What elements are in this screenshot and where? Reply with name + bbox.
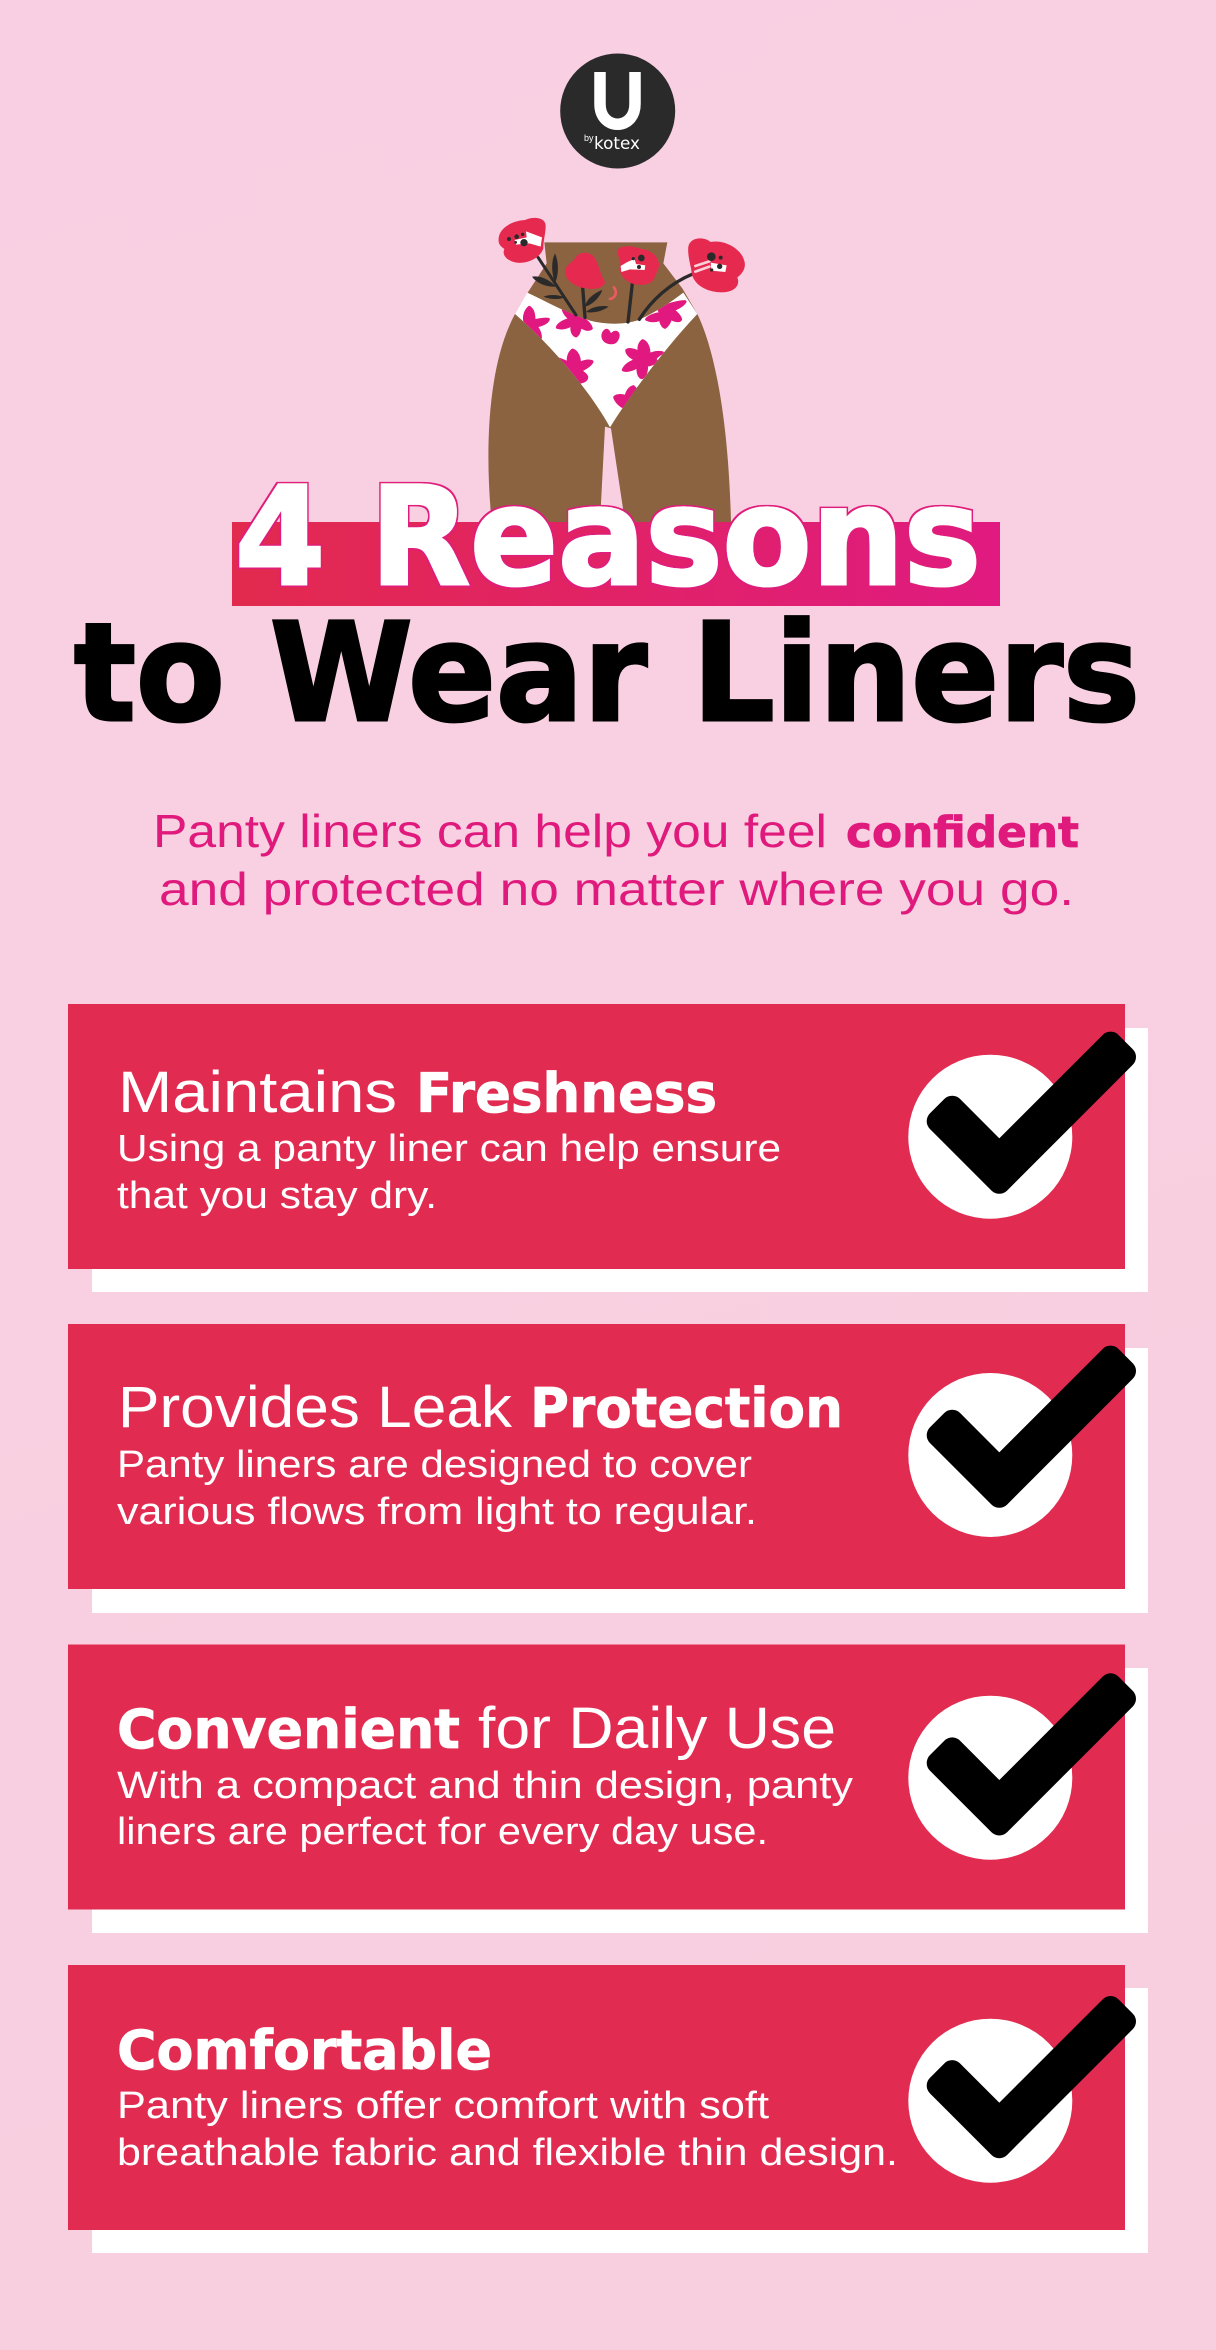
poppy: centre right [618,246,659,285]
icon: check mark [938,2007,1125,2147]
subtitle: Panty liners can help you feel [153,805,827,857]
stems and leaves [538,257,693,322]
illustration: body with floral underwear and poppies [488,218,745,522]
panel: Convenient for Daily Use: liners are perfect for every day use. [117,1811,768,1853]
poppy: far left [499,218,546,263]
title line 2: to Wear Liners: to Wear Liners [74,595,1140,753]
panel: Convenient for Daily Use [68,1644,1148,1933]
logo: U by kotex [560,54,675,168]
panel: Convenient for Daily Use: Convenient [117,1698,460,1761]
title highlight bar [232,522,1000,606]
icon: check mark [938,1043,1125,1183]
panel: Provides Leak Protection [68,1324,1148,1613]
panel: Comfortable: Panty liners offer comfort with soft [117,2085,769,2127]
panel: Comfortable: Comfortable [117,2019,492,2082]
panel: Maintains Freshness: Using a panty liner can help ensure [117,1128,781,1170]
poppy: far right [688,238,745,292]
title line 1: 4 Reasons: 4 Reasons [235,459,981,617]
icon: check mark [938,1684,1125,1824]
body [488,242,731,522]
subtitle: and protected no matter where you go. [159,863,1074,915]
subtitle: confident [846,808,1079,858]
red bud [565,253,605,289]
underwear [515,293,697,427]
panel: Provides Leak Protection: Provides Leak [118,1375,513,1440]
panel: Maintains Freshness: Freshness [416,1062,717,1125]
small mark [610,287,616,299]
logo: U by kotex: kotex [594,134,640,154]
icon: check mark [938,1357,1125,1497]
panel: Maintains Freshness [68,1004,1148,1292]
panel: Maintains Freshness: Maintains [118,1060,397,1125]
panel: Provides Leak Protection: various flows from light to regular. [117,1491,757,1533]
logo: U by kotex: by [584,133,594,143]
panel: Convenient for Daily Use: With a compact and thin design, panty [117,1765,853,1807]
subtitle [153,805,1079,915]
panel: Provides Leak Protection: Protection [530,1377,843,1440]
panel: Comfortable [68,1965,1148,2253]
panel: Provides Leak Protection: Panty liners are designed to cover [117,1444,752,1486]
panel: Convenient for Daily Use: for Daily Use [478,1696,836,1761]
panel: Maintains Freshness: that you stay dry. [117,1175,437,1217]
panel: Comfortable: breathable fabric and flexible thin design. [117,2132,898,2174]
